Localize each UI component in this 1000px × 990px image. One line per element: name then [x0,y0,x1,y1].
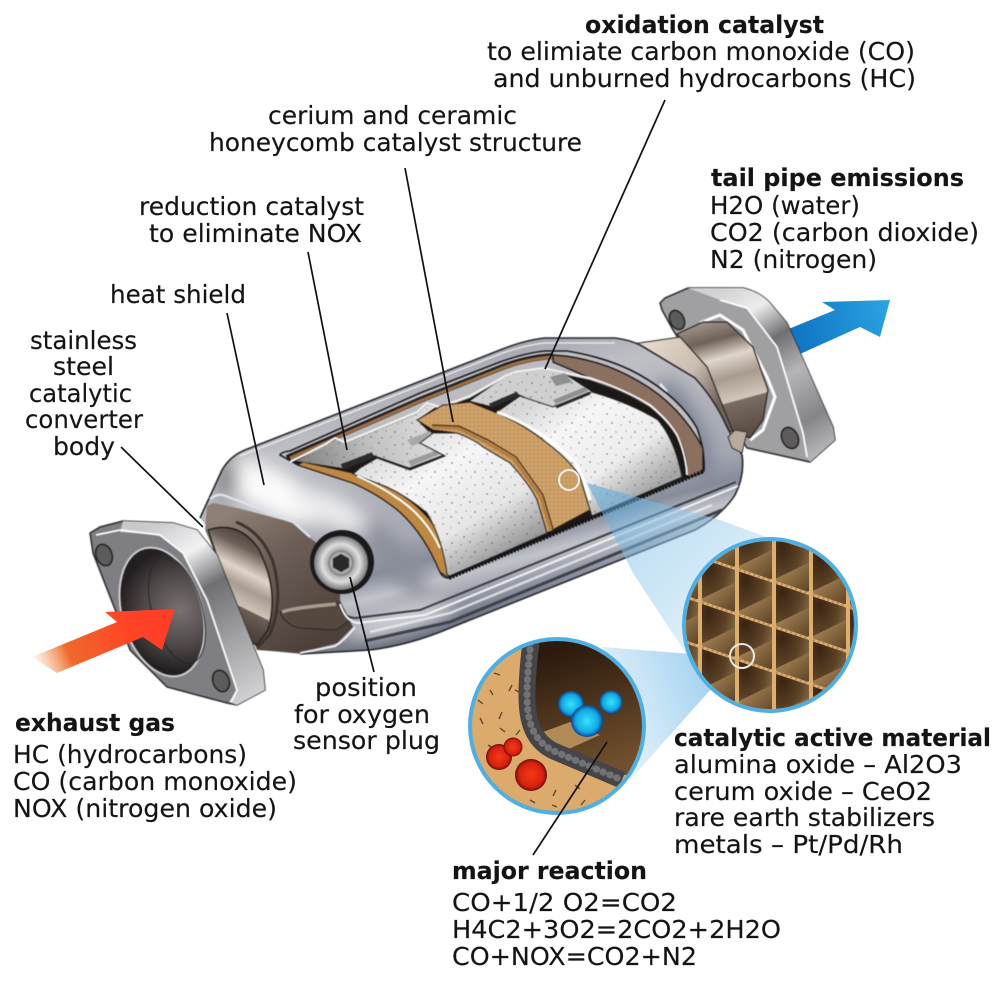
label: honeycomb structure: cerium and ceramic [268,101,517,130]
label: converter body [25,326,144,461]
right gray mat [470,369,592,407]
label: major reaction: CO+NOX=CO2+N2 [452,942,697,971]
label: reduction catalyst [139,192,364,248]
right catalyst brick [490,373,682,516]
label: major reaction: H4C2+3O2=2CO2+2H2O [452,915,781,944]
label: catalytic active material: alumina oxide – Al2O3 [674,750,962,779]
pore interior [530,641,642,776]
lower body rim [337,482,736,618]
label: converter body: body [53,432,115,461]
right pipe ring [677,322,768,438]
label: oxygen sensor [293,673,440,755]
label: tail pipe emissions: tail pipe emissions [711,164,964,192]
label: oxidation catalyst: to elimiate carbon monoxide (CO) [487,37,915,66]
left pipe neck [205,503,353,653]
dark inner rail [287,356,553,458]
zoom beam to honeycomb [587,483,780,660]
label: converter body: steel [53,352,114,381]
label: tail pipe emissions: N2 (nitrogen) [710,245,877,274]
label: tail pipe emissions: CO2 (carbon dioxide) [710,218,979,247]
label: honeycomb structure: honeycomb catalyst structure [209,128,582,157]
label: oxygen sensor: sensor plug [293,726,440,755]
ceramic honeycomb band [417,402,590,533]
band inner strip [432,427,551,531]
label: tail pipe emissions [710,164,979,274]
label: major reaction [452,857,781,971]
left pipe ring [208,527,272,645]
honeycomb magnifier [682,537,858,713]
label: catalytic active material: cerum oxide – CeO2 [674,777,932,806]
sand texture [478,673,585,807]
cutaway window [280,351,704,578]
locator ring on catalyst [559,470,579,490]
heat shield body [200,338,743,654]
label: exhaust gas: NOX (nitrogen oxide) [13,794,277,823]
label: major reaction: CO+1/2 O2=CO2 [452,888,677,917]
label: oxidation catalyst: oxidation catalyst [585,11,824,39]
body shine patches [213,373,725,643]
interior shadow [292,370,687,578]
neck lozenge highlight [280,603,350,630]
label: heat shield: heat shield [110,280,246,309]
right flange [660,288,835,462]
wavy mat edge [290,368,687,475]
left flange [90,521,265,705]
sensor plug [310,530,374,594]
label: converter body: converter [25,405,144,434]
label: oxidation catalyst [487,11,916,93]
tail pipe arrow [786,300,890,354]
label: exhaust gas: HC (hydrocarbons) [13,740,247,769]
leader lines [121,100,665,855]
label: exhaust gas: CO (carbon monoxide) [13,767,297,796]
brown insulation strip [290,357,553,458]
zoom beam to reaction detail [603,647,712,780]
label: catalytic active material: rare earth stabilizers [674,803,935,832]
right brown band [553,355,703,478]
label: honeycomb structure [209,101,582,157]
left tan strip [298,462,449,578]
oxidised molecules [558,690,622,737]
label: catalytic active material: metals – Pt/Pd/Rh [674,830,903,859]
label: major reaction: major reaction [452,857,647,885]
label: reduction catalyst: reduction catalyst [139,192,364,221]
label: reduction catalyst: to eliminate NOX [149,219,362,248]
exhaust gas arrow [32,609,175,673]
label: converter body: stainless [30,326,137,355]
right side nub [728,430,747,453]
pollutant molecules [486,738,547,791]
converter illustration [90,288,835,705]
left catalyst brick [353,433,547,576]
label: oxygen sensor: position [315,673,417,702]
label: oxidation catalyst: and unburned hydrocarbons (HC) [493,64,916,93]
label: tail pipe emissions: H2O (water) [710,191,860,220]
right pipe tube [632,337,733,432]
left gray mat [296,405,445,468]
label: exhaust gas: exhaust gas [15,709,175,737]
flange opening [105,538,219,686]
label: converter body: catalytic [29,379,132,408]
reaction magnifier [468,637,650,815]
catalyst bead layer [527,642,622,780]
label: oxygen sensor: for oxygen [294,700,430,729]
white crescent around pipe [700,315,775,440]
label: exhaust gas [13,709,297,823]
label: catalytic active material [674,724,991,859]
label: catalytic active material: catalytic active material [674,724,991,752]
